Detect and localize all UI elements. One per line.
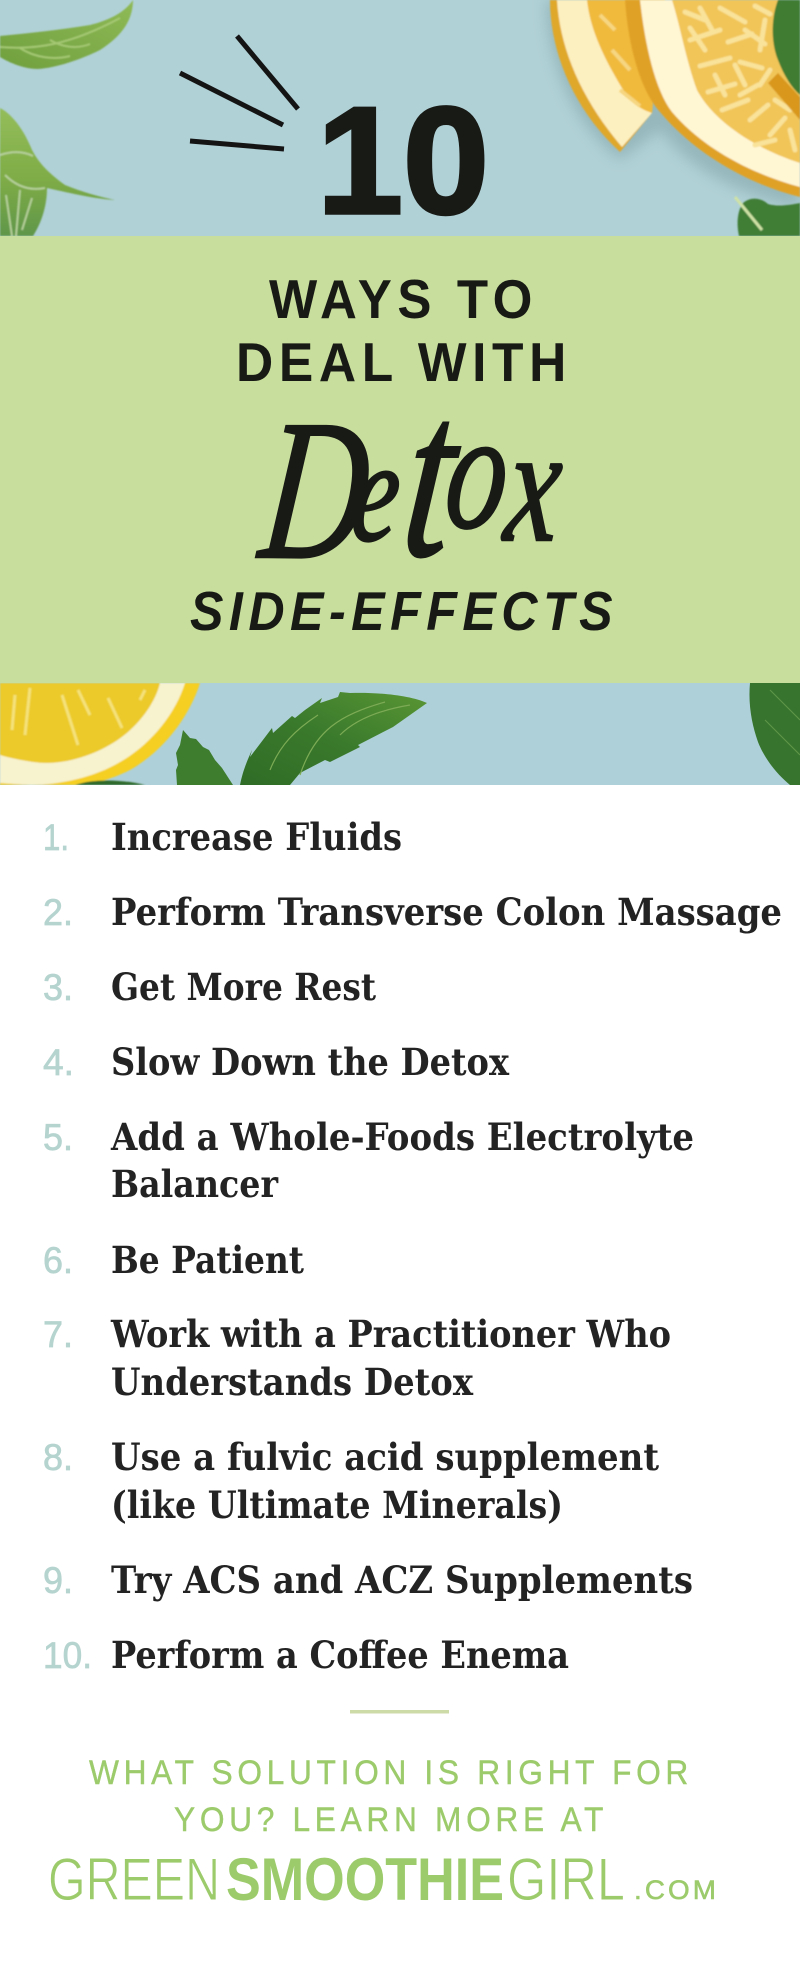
heading: detox script: t: [393, 347, 472, 606]
heading: detox script: e: [345, 412, 408, 572]
item 8: [43, 1435, 659, 1527]
heading: ways to: WAYS TO: [269, 268, 538, 330]
item 6: Be Patient: [111, 1238, 304, 1282]
item 10: Perform a Coffee Enema: [111, 1633, 569, 1677]
heading: detox script: D: [251, 379, 380, 600]
item 3: Get More Rest: [111, 965, 376, 1009]
footer: website logo: .COM: [634, 1875, 719, 1905]
item 4: 4.: [43, 1042, 74, 1083]
item 7: Understands Detox: [111, 1360, 474, 1404]
icon: orange slice shadow: [546, 0, 800, 208]
item 6: [43, 1238, 304, 1282]
icon: small mint leaf bottom right: [735, 197, 800, 236]
item 8: (like Ultimate Minerals): [111, 1483, 563, 1527]
icon: small mint leaf: [176, 730, 233, 785]
icon: large mint leaf: [240, 692, 427, 785]
item 5: Add a Whole-Foods Electrolyte: [110, 1115, 694, 1159]
icon: lemon wedge: [0, 683, 200, 785]
item 6: 6.: [43, 1240, 73, 1281]
panel: numbered list: [43, 815, 782, 1677]
item 5: 5.: [43, 1117, 73, 1158]
footer: call to action: [89, 1754, 693, 1839]
panel: green title block: [0, 236, 800, 683]
footer: website logo: [48, 1846, 719, 1913]
item 4: Slow Down the Detox: [111, 1040, 510, 1084]
item 5: [43, 1115, 694, 1206]
item 9: 9.: [43, 1560, 73, 1601]
item 7: Work with a Practitioner Who: [110, 1312, 671, 1356]
footer: call to action: YOU? LEARN MORE AT: [174, 1801, 608, 1839]
icon: left orange wedge: [550, 0, 665, 152]
panel: top photo banner: [0, 0, 800, 236]
item 8: 8.: [43, 1437, 73, 1478]
icon: upper left basil leaf: [0, 0, 133, 69]
item 3: 3.: [43, 967, 73, 1008]
footer: website logo: GREEN: [48, 1846, 220, 1913]
item 5: Balancer: [111, 1162, 278, 1206]
heading: detox script: o: [438, 377, 518, 564]
item 7: [43, 1312, 671, 1404]
item 8: Use a fulvic acid supplement: [111, 1435, 659, 1479]
icon: large orange slice: [625, 0, 800, 197]
item 1: 1.: [43, 817, 69, 858]
footer: website logo: GIRL: [507, 1846, 625, 1913]
heading: deal with: DEAL WITH: [236, 331, 572, 393]
item 10: 10.: [43, 1635, 92, 1676]
item 1: Increase Fluids: [111, 815, 402, 859]
panel: bottom photo banner: [0, 683, 800, 785]
footer: call to action: WHAT SOLUTION IS RIGHT FOR: [89, 1754, 693, 1792]
heading: detox script: x: [497, 394, 571, 577]
footer: website logo: SMOOTHIE: [226, 1846, 504, 1913]
item 9: Try ACS and ACZ Supplements: [111, 1558, 693, 1602]
item 7: 7.: [43, 1314, 73, 1355]
item 2: 2.: [43, 892, 73, 933]
icon: burst lines: [180, 36, 298, 149]
heading: number 10: 10: [317, 76, 489, 246]
icon: lower left mint leaf: [0, 108, 115, 236]
icon: right mint leaf: [749, 683, 800, 785]
heading: side-effects: SIDE-EFFECTS: [190, 580, 618, 642]
